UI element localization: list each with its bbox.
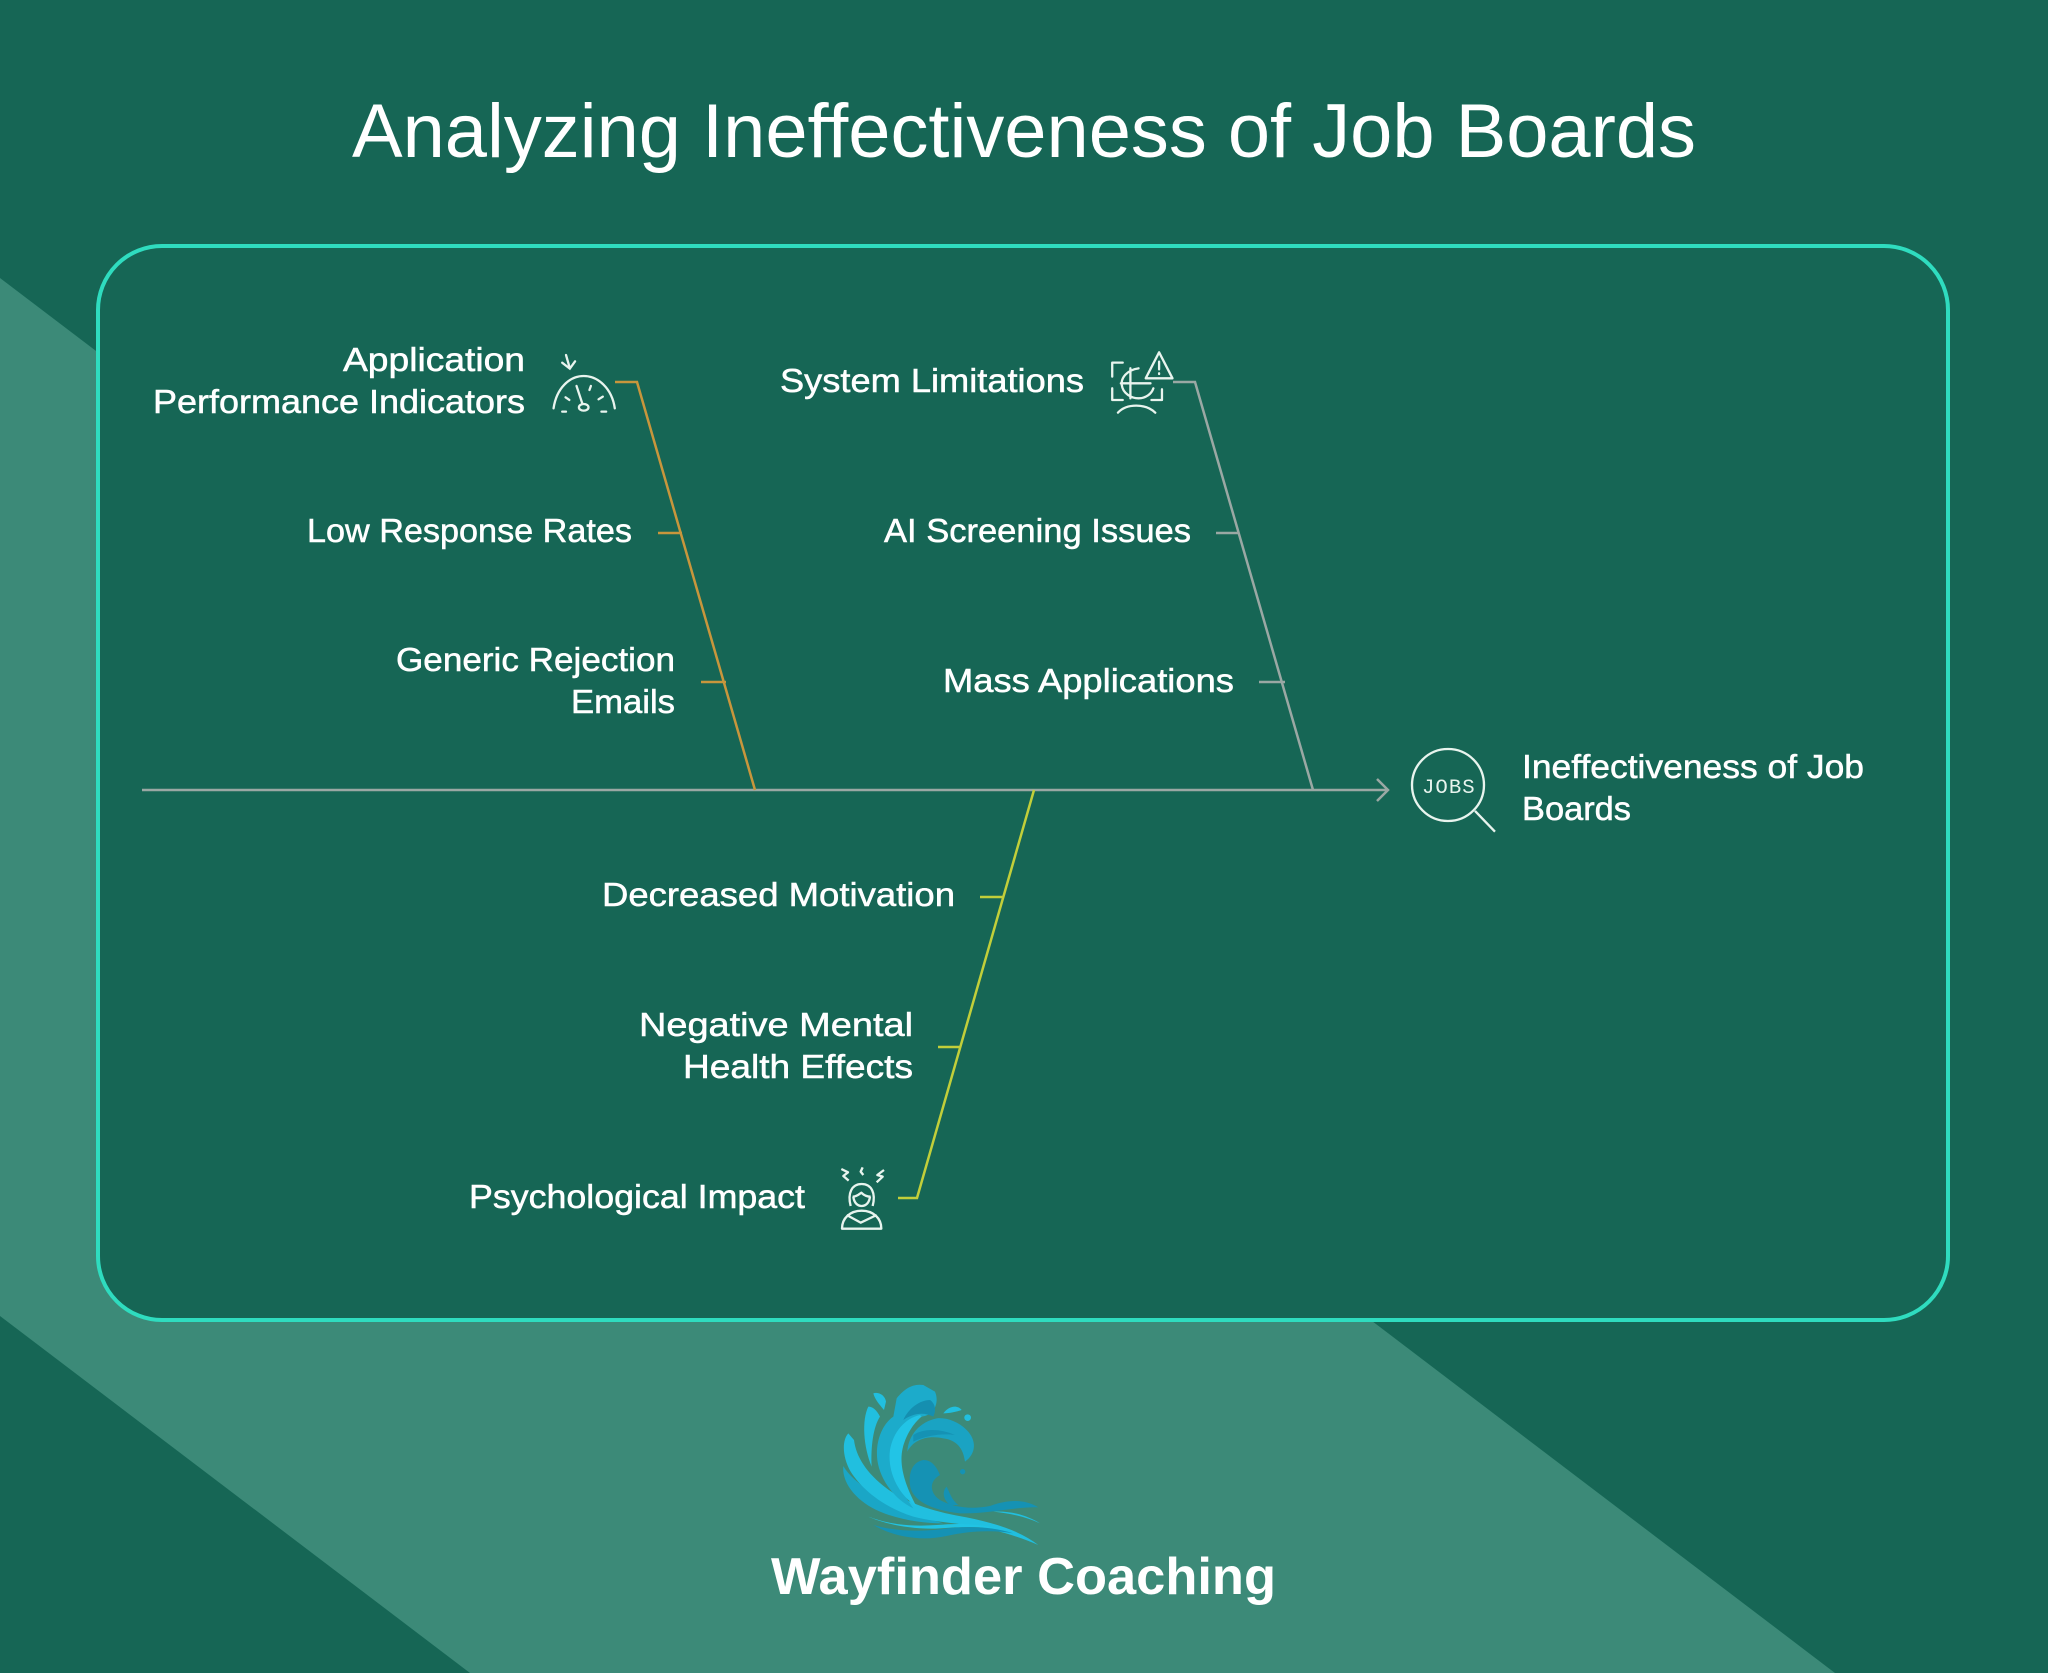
label: decreased motivation: Decreased Motivation: [602, 876, 955, 913]
main panel: [98, 246, 1948, 1320]
label: generic rejection emails: [396, 641, 675, 720]
icon: jobs magnifier: JOBS: [1422, 777, 1475, 800]
label: effect: [1522, 748, 1864, 827]
icon: gauge: [554, 355, 615, 412]
label: negative mental health effects: [639, 1006, 913, 1085]
effect: ineffectiveness of job boards: [1412, 748, 1864, 832]
title: Analyzing Ineffectiveness of Job Boards: [352, 89, 1696, 174]
label: psychological impact: Psychological Impact: [469, 1178, 805, 1215]
icon: ai warning face: [1112, 352, 1172, 413]
branch: application performance: [153, 341, 755, 790]
fishbone spine arrow: [142, 779, 1388, 801]
label: effect: Boards: [1522, 790, 1631, 827]
label: effect: Ineffectiveness of Job: [1522, 748, 1864, 785]
label: low response rates: Low Response Rates: [307, 512, 632, 549]
label: mass applications: Mass Applications: [943, 662, 1234, 699]
logo: wave: [843, 1385, 1040, 1545]
label: negative mental health effects: Negative Mental: [639, 1006, 913, 1043]
label: application performance indicators: [153, 341, 525, 420]
label: negative mental health effects: Health Effects: [683, 1048, 913, 1085]
icon: stressed person: [841, 1167, 884, 1229]
branch: system limitations: [780, 352, 1313, 790]
branch: psychological impact: [469, 790, 1034, 1229]
label: ai screening issues: AI Screening Issues: [884, 512, 1191, 549]
label: application performance indicators: Performance Indicators: [153, 383, 525, 420]
label: generic rejection emails: Generic Rejection: [396, 641, 675, 678]
label: generic rejection emails: Emails: [571, 683, 675, 720]
brand name: Wayfinder Coaching: [771, 1548, 1276, 1606]
label: system limitations: System Limitations: [780, 362, 1084, 399]
label: application performance indicators: Application: [343, 341, 525, 378]
icon: jobs magnifier: [1412, 749, 1495, 832]
